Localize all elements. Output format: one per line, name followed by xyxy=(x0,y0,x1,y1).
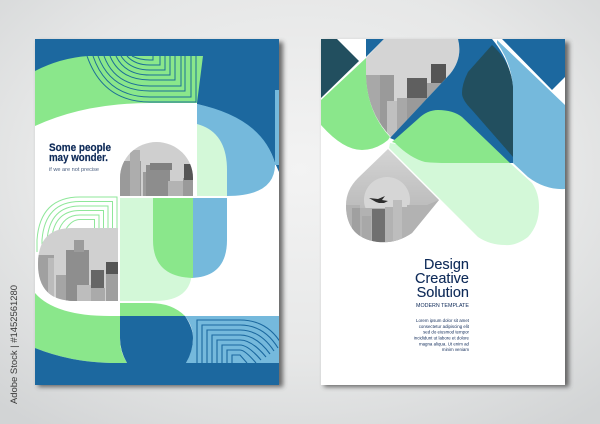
big blue shape xyxy=(390,39,513,163)
pale line arcs xyxy=(37,197,117,252)
subheading: modern template: MODERN TEMPLATE xyxy=(416,303,469,309)
body text: magna aliqua. Ut enim ad xyxy=(419,342,470,346)
body text: sed do eiusmod tempor xyxy=(423,330,470,334)
pale green tall shape xyxy=(120,198,192,301)
body text: Lorem ipsum dolor sit amet xyxy=(416,318,470,323)
heading: some people: may wonder. xyxy=(49,152,108,164)
dark teal triangle xyxy=(321,39,359,98)
icon: plane xyxy=(369,196,388,203)
green left shape xyxy=(321,58,390,150)
light blue diagonal xyxy=(497,40,565,189)
small blue triangle xyxy=(366,39,384,57)
heading: design creative solution: Solution xyxy=(417,285,469,301)
bottom blue band xyxy=(35,348,279,385)
light blue lined block xyxy=(185,316,282,363)
photo: plane and skyline xyxy=(346,148,440,244)
left page xyxy=(35,39,282,385)
pale green panel top xyxy=(197,124,227,196)
green center shape xyxy=(392,110,510,163)
dark blue center block xyxy=(120,316,193,363)
page base xyxy=(35,103,279,363)
body text xyxy=(414,318,470,352)
dark teal shape xyxy=(462,45,513,157)
light blue and green U shape xyxy=(153,198,227,278)
light blue quarter shape xyxy=(197,104,275,196)
photo: city diagonal xyxy=(366,39,464,140)
heading: design creative solution: Creative xyxy=(415,271,469,287)
body text: incididunt ut labore et dolore xyxy=(414,336,470,340)
top right blue shape xyxy=(502,39,565,90)
right page xyxy=(321,39,565,385)
photo: rounded skyline xyxy=(38,228,118,301)
page shadows xyxy=(38,42,569,387)
heading: design creative solution xyxy=(415,257,469,301)
photo: arch skyline xyxy=(120,142,193,196)
concentric lines top xyxy=(87,54,196,102)
heading: some people xyxy=(49,142,111,164)
body text: minim veniam xyxy=(442,347,469,352)
body text: consectetur adipiscing elit xyxy=(419,324,470,329)
top blue band xyxy=(35,39,279,172)
green top shape xyxy=(35,56,203,126)
green lower left xyxy=(35,293,127,363)
heading: design creative solution: Design xyxy=(424,257,469,273)
subheading: if we are not precise xyxy=(49,167,99,173)
green lower dome xyxy=(120,303,185,316)
pale green pill xyxy=(389,143,539,245)
right light blue strip xyxy=(275,90,279,165)
page base xyxy=(321,39,565,385)
stock credit: Adobe Stock | #1452561280 xyxy=(9,285,19,404)
heading: some people: Some people xyxy=(49,142,111,154)
